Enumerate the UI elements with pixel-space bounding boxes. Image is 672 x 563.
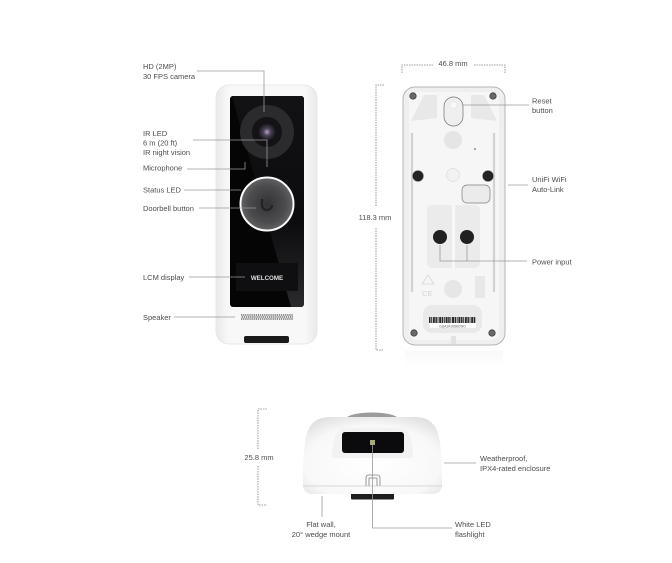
front view of doorbell xyxy=(216,85,317,344)
back view of doorbell xyxy=(403,87,505,345)
label: reset button: button xyxy=(532,106,553,115)
LED xyxy=(370,440,375,445)
label recess xyxy=(423,305,482,333)
label: IR LED: IR night vision xyxy=(143,148,190,157)
label: camera: HD (2MP) xyxy=(143,62,177,71)
reset recess xyxy=(444,97,463,126)
small pinhole xyxy=(474,148,476,150)
label: IR LED: 6 m (20 ft) xyxy=(143,138,178,148)
regulatory marks xyxy=(422,275,485,298)
centre hole xyxy=(446,168,460,182)
power terminal screws xyxy=(433,230,474,244)
front callouts xyxy=(143,62,267,322)
label: IR LED: IR LED xyxy=(143,129,168,138)
terminal recess xyxy=(427,205,480,268)
regulatory marks: CE xyxy=(422,289,432,298)
bottom body xyxy=(303,417,442,494)
label: power input: Power input xyxy=(532,258,573,266)
LCM display xyxy=(236,263,298,291)
camera lens xyxy=(240,105,294,159)
label: microphone: Microphone xyxy=(143,164,182,172)
label: camera: 30 FPS camera xyxy=(143,72,196,81)
label: reset button: Reset xyxy=(532,96,553,106)
barcode: GQA1A19D8CWO xyxy=(439,324,466,328)
bottom slot xyxy=(244,336,289,343)
width dimension: 46.8 mm xyxy=(438,59,468,68)
dark flashlight window xyxy=(342,432,404,453)
black screen panel xyxy=(230,96,304,307)
bottom notch xyxy=(451,336,456,344)
barcode xyxy=(429,320,476,328)
bottom callouts xyxy=(244,409,550,539)
label: LCM display: LCM display xyxy=(143,273,185,282)
upper mounting hole xyxy=(444,131,462,149)
top dome xyxy=(346,412,398,426)
label: flat wall: Flat wall, xyxy=(306,520,336,529)
height dimension: 118.3 mm xyxy=(359,213,391,222)
label: flat wall: 20° wedge mount xyxy=(292,530,351,539)
corner screws xyxy=(410,93,496,336)
seam xyxy=(303,485,442,487)
lower hole xyxy=(444,280,462,298)
width dimension xyxy=(402,59,505,73)
top shadow corners xyxy=(411,95,497,121)
label: status LED: Status LED xyxy=(143,186,182,194)
speaker grille xyxy=(241,315,293,319)
window surround xyxy=(332,428,413,458)
doorbell button with status LED ring xyxy=(240,178,294,230)
wedge foot xyxy=(351,492,394,500)
label: white LED flashlight: flashlight xyxy=(455,530,486,539)
label: white LED flashlight: White LED xyxy=(455,520,491,529)
label: speaker: Speaker xyxy=(143,313,171,322)
Auto-Link window xyxy=(462,185,490,203)
screen reflection xyxy=(232,96,304,307)
height dimension xyxy=(359,85,391,350)
label: weatherproof: Weatherproof, xyxy=(480,454,527,463)
inner plate xyxy=(409,92,499,340)
back callouts xyxy=(440,96,573,266)
release tab xyxy=(366,475,380,486)
label: doorbell button: Doorbell button xyxy=(143,204,194,213)
front body xyxy=(216,85,317,344)
side rails xyxy=(412,133,494,292)
LCM display: WELCOME xyxy=(251,275,283,282)
bottom view of doorbell xyxy=(303,412,442,500)
side screws xyxy=(412,170,494,182)
label: weatherproof: IPX4-rated enclosure xyxy=(480,464,550,473)
back body xyxy=(403,87,505,345)
label: UniFi WiFi Auto-Link: UniFi WiFi xyxy=(532,175,567,184)
label: depth dimension: 25.8 mm xyxy=(244,453,274,462)
label: UniFi WiFi Auto-Link: Auto-Link xyxy=(532,185,564,194)
reflection of back view xyxy=(405,351,503,367)
